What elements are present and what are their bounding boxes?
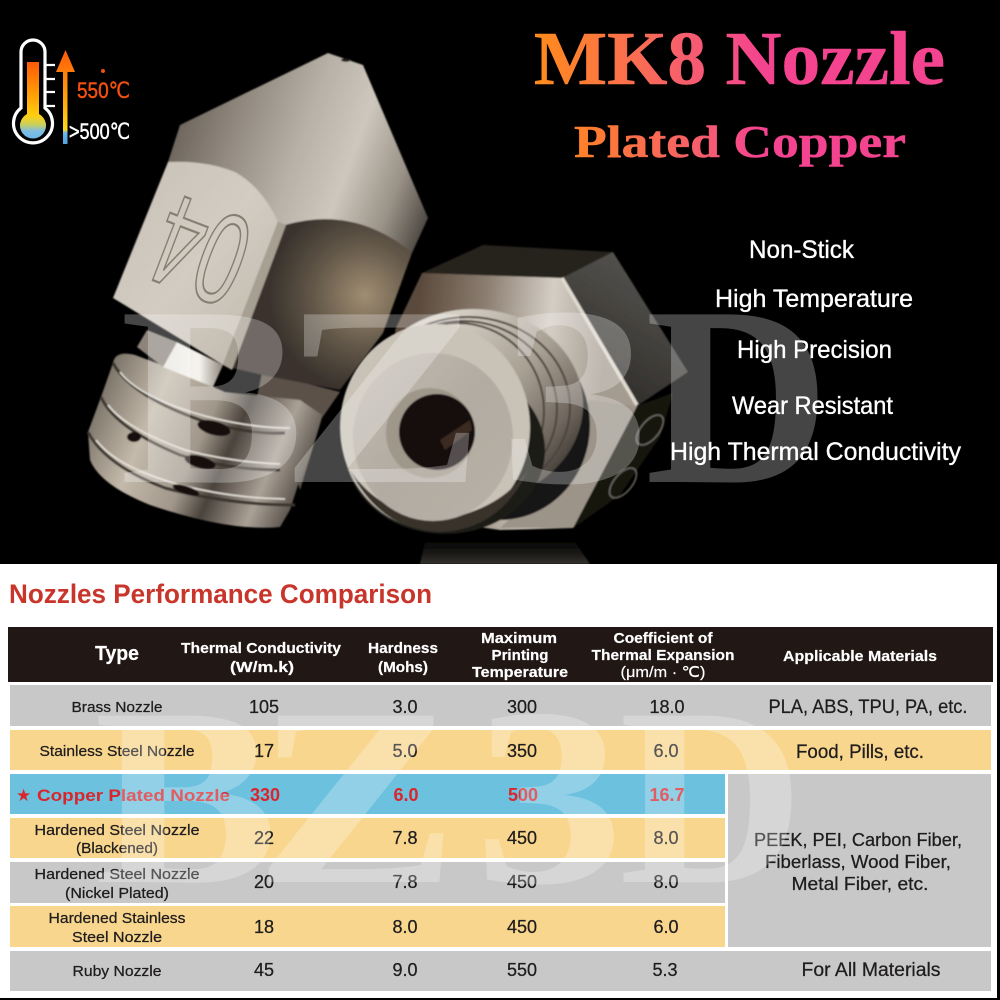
row: hardened steel nickel plated: 7.8 [392, 872, 418, 892]
flange shadow [345, 366, 545, 534]
row: brass nozzle: 18.0 [649, 697, 685, 717]
face bevel [223, 222, 286, 370]
row: stainless steel nozzle [10, 730, 991, 770]
table header: Coefficient of [614, 630, 714, 647]
feature list: High Thermal Conductivity [670, 438, 961, 466]
watermark lower: B [94, 656, 278, 937]
front disk [353, 353, 513, 521]
row: hardened stainless steel [10, 906, 725, 947]
row: brass nozzle: 300 [507, 697, 537, 717]
hex top face [422, 245, 613, 278]
side flat [232, 219, 412, 390]
row: brass nozzle: 3.0 [392, 697, 418, 717]
feature list: High Precision [737, 336, 892, 364]
row: copper plated nozzle: 500 [508, 785, 538, 805]
photo: front nozzle [88, 53, 428, 528]
table header: Type [95, 643, 139, 665]
watermark lower: Z [254, 656, 459, 937]
flange lower shadow [350, 470, 528, 532]
550 label: 550℃ [77, 78, 130, 103]
row: hardened steel blackened: Hardened Steel Nozzle [34, 822, 199, 839]
table header: Temperature [472, 664, 568, 681]
merged materials cell [728, 774, 991, 947]
row: hardened steel nickel plated: 20 [254, 872, 274, 892]
bore chamfer [386, 388, 474, 478]
watermark lower [94, 656, 804, 937]
table header: Printing [492, 647, 548, 664]
subtitle: Plated Copper [574, 116, 906, 167]
hex engraving [605, 410, 668, 503]
engraved 04: 04 [133, 167, 269, 335]
row: stainless steel nozzle: 5.0 [392, 741, 418, 761]
row: ruby nozzle: For All Materials [802, 960, 940, 981]
bore streak [440, 420, 472, 450]
row: hardened steel nickel plated: Hardened Steel Nozzle [34, 866, 199, 883]
row: copper plated nozzle: 330 [250, 785, 280, 805]
hex front lower light area [500, 400, 637, 528]
table header: (W/m.k) [230, 659, 294, 676]
thread recess shadow [410, 330, 590, 520]
hex lower dark face [560, 393, 673, 528]
table header: Hardness [368, 640, 438, 657]
table header: Thermal Conductivity [181, 640, 342, 657]
row: ruby nozzle: 550 [507, 960, 537, 980]
thermometer outline [13, 40, 52, 143]
table header: (μm/m · ℃) [620, 664, 706, 681]
watermark upper: D [645, 255, 830, 538]
watermark upper: B [120, 255, 304, 538]
row: copper plated nozzle: 6.0 [393, 785, 419, 805]
row: stainless steel nozzle: 350 [507, 741, 537, 761]
hex bright edge [562, 278, 637, 405]
row: hardened steel nickel plated [10, 862, 725, 903]
bore hole [399, 394, 475, 470]
table header [8, 627, 993, 682]
row: copper plated nozzle: ★ [16, 786, 31, 806]
row: hardened steel nickel plated: (Nickel Plated) [65, 885, 169, 902]
thread highlights [96, 372, 290, 499]
neck bright part [163, 342, 223, 387]
feature list: Non-Stick [749, 236, 854, 264]
row: hardened stainless steel: 18 [254, 917, 274, 937]
watermark upper [120, 255, 830, 538]
hex right face [562, 252, 688, 406]
feature list: High Temperature [715, 285, 913, 313]
watermark lower: 3 [474, 656, 624, 937]
row: stainless steel nozzle: 6.0 [653, 741, 679, 761]
thread rings [366, 317, 570, 499]
row: brass nozzle: 105 [249, 697, 279, 717]
table header: Thermal Expansion [592, 647, 734, 664]
table header: Applicable Materials [783, 648, 937, 665]
row: hardened steel nickel plated: 8.0 [653, 872, 679, 892]
tip bore [341, 58, 351, 62]
collar behind [257, 372, 340, 490]
row: ruby nozzle [10, 951, 991, 991]
row: stainless steel nozzle: Food, Pills, etc. [796, 742, 924, 763]
row: hardened steel blackened: (Blackened) [76, 840, 158, 857]
row: hardened steel blackened: 450 [507, 828, 537, 848]
row: hardened steel blackened: 7.8 [392, 828, 418, 848]
row: brass nozzle: Brass Nozzle [72, 699, 162, 716]
thread edges dark [88, 363, 295, 505]
row: ruby nozzle: Ruby Nozzle [72, 963, 162, 980]
watermark upper: 3 [500, 255, 650, 538]
temperature arrow [56, 50, 75, 144]
threaded body [363, 309, 583, 501]
hex front face [395, 273, 637, 530]
row: ruby nozzle: 9.0 [392, 960, 418, 980]
title: MK8 Nozzle [534, 17, 945, 101]
row: hardened stainless steel: Hardened Stainless [48, 910, 186, 927]
row: hardened stainless steel: 450 [507, 917, 537, 937]
photo: rear nozzle [340, 245, 688, 534]
merged materials cell: Fiberlass, Wood Fiber, [765, 852, 951, 872]
neck shadow part [137, 330, 177, 367]
merged materials cell: Metal Fiber, etc. [792, 874, 928, 894]
row: hardened steel nickel plated: 450 [507, 872, 537, 892]
row: hardened steel blackened: 22 [254, 828, 274, 848]
row: hardened stainless steel: 8.0 [392, 917, 418, 937]
panel: comparison table background [0, 564, 997, 998]
row: ruby nozzle: 45 [254, 960, 274, 980]
row: copper plated nozzle [10, 774, 725, 814]
thermometer icon [13, 40, 130, 144]
flange chamfer [340, 324, 530, 530]
cone [168, 53, 428, 253]
row: copper plated nozzle: Copper Plated Nozzle [37, 786, 230, 805]
scale ticks [46, 65, 55, 106]
row: hardened stainless steel: 6.0 [653, 917, 679, 937]
row: ruby nozzle: 5.3 [652, 960, 678, 980]
row: stainless steel nozzle: 17 [254, 741, 274, 761]
table header: (Mohs) [378, 659, 428, 676]
550 dot [101, 69, 105, 73]
500 label: >500℃ [69, 119, 130, 144]
watermark upper: Z [280, 255, 485, 538]
row: copper plated nozzle: 16.7 [649, 785, 685, 805]
merged materials cell: PEEK, PEI, Carbon Fiber, [754, 830, 962, 850]
thread dark blotches [127, 417, 232, 498]
feature list [670, 236, 961, 466]
heading: Nozzles Performance Comparison [9, 579, 432, 609]
table header: Maximum [481, 630, 557, 647]
row: hardened steel blackened [10, 818, 725, 858]
thermometer fill [20, 62, 46, 139]
main flat face [113, 162, 278, 365]
watermark lower: D [619, 656, 804, 937]
row: hardened steel blackened: 8.0 [653, 828, 679, 848]
row: brass nozzle: PLA, ABS, TPU, PA, etc. [768, 697, 968, 718]
nozzle reflection [420, 542, 590, 564]
row: hardened stainless steel: Steel Nozzle [72, 929, 162, 946]
row: stainless steel nozzle: Stainless Steel Nozzle [40, 743, 194, 760]
feature list: Wear Resistant [732, 392, 893, 420]
thread body [88, 354, 322, 528]
row: brass nozzle [10, 685, 991, 726]
